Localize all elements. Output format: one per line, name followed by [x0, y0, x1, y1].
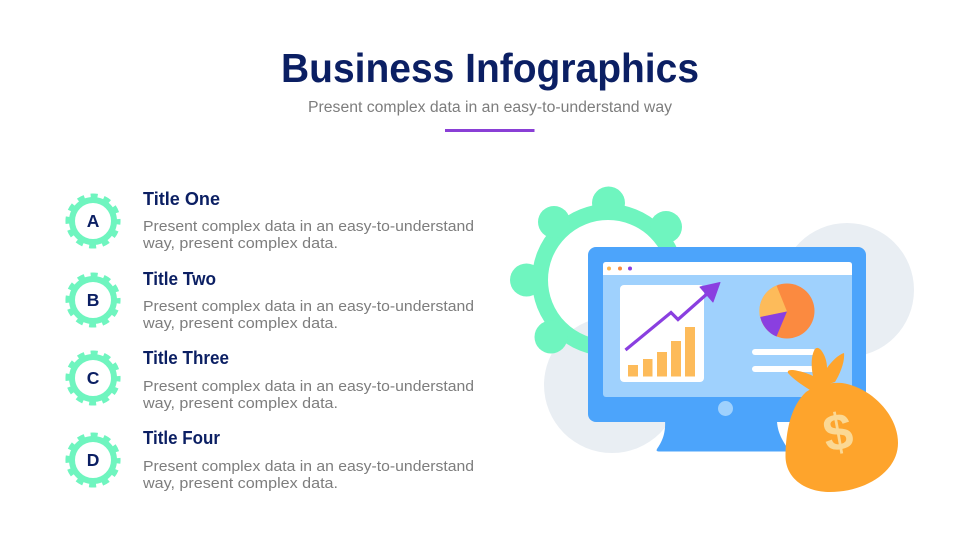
icon: gear A: A	[87, 211, 100, 231]
heading: Title Two: Title Two	[143, 269, 216, 289]
power button	[718, 401, 733, 416]
list item D	[68, 428, 474, 492]
list item C	[68, 348, 474, 412]
screen	[603, 262, 852, 397]
text block A: Present complex data in an easy-to-understand	[143, 218, 474, 235]
background circle left	[544, 317, 680, 453]
heading: Title Four: Title Four	[143, 428, 220, 448]
arrow: growth trend	[626, 282, 720, 350]
monitor body	[588, 247, 866, 422]
text block A: way, present complex data.	[142, 235, 338, 252]
icon: gear A	[68, 196, 118, 246]
text block D: way, present complex data.	[142, 475, 338, 492]
text block B: way, present complex data.	[142, 315, 338, 332]
large gear	[510, 186, 682, 354]
illustration: monitor with gear and money bag	[510, 186, 914, 492]
bag body	[785, 383, 898, 492]
heading: Title One: Title One	[143, 189, 220, 209]
text block C: way, present complex data.	[142, 395, 338, 412]
icon: gear D	[68, 435, 118, 485]
text block C: Present complex data in an easy-to-understand	[143, 378, 474, 395]
list item A	[68, 189, 474, 252]
icon: money bag	[785, 348, 898, 492]
text block D: Present complex data in an easy-to-understand	[143, 458, 474, 475]
icon: gear B	[68, 275, 118, 325]
subtitle: Present complex data in an easy-to-understand way	[308, 99, 672, 116]
list item B	[68, 269, 474, 332]
monitor stand	[657, 420, 790, 452]
background circle right	[780, 223, 914, 357]
bar chart	[628, 327, 695, 376]
dollar sign: $	[819, 402, 857, 464]
chart card	[620, 285, 704, 382]
heading: Title Three: Title Three	[143, 348, 229, 368]
icon: gear B: B	[87, 290, 99, 310]
icon: gear C: C	[87, 368, 100, 388]
pie chart	[759, 284, 814, 338]
icon: gear C	[68, 353, 118, 403]
text block B: Present complex data in an easy-to-understand	[143, 298, 474, 315]
window toolbar	[603, 262, 852, 275]
bag tie	[788, 348, 844, 390]
title accent line	[445, 129, 534, 132]
title: Business Infographics	[281, 45, 699, 91]
icon: gear D: D	[87, 450, 99, 470]
text placeholder lines	[752, 349, 816, 372]
